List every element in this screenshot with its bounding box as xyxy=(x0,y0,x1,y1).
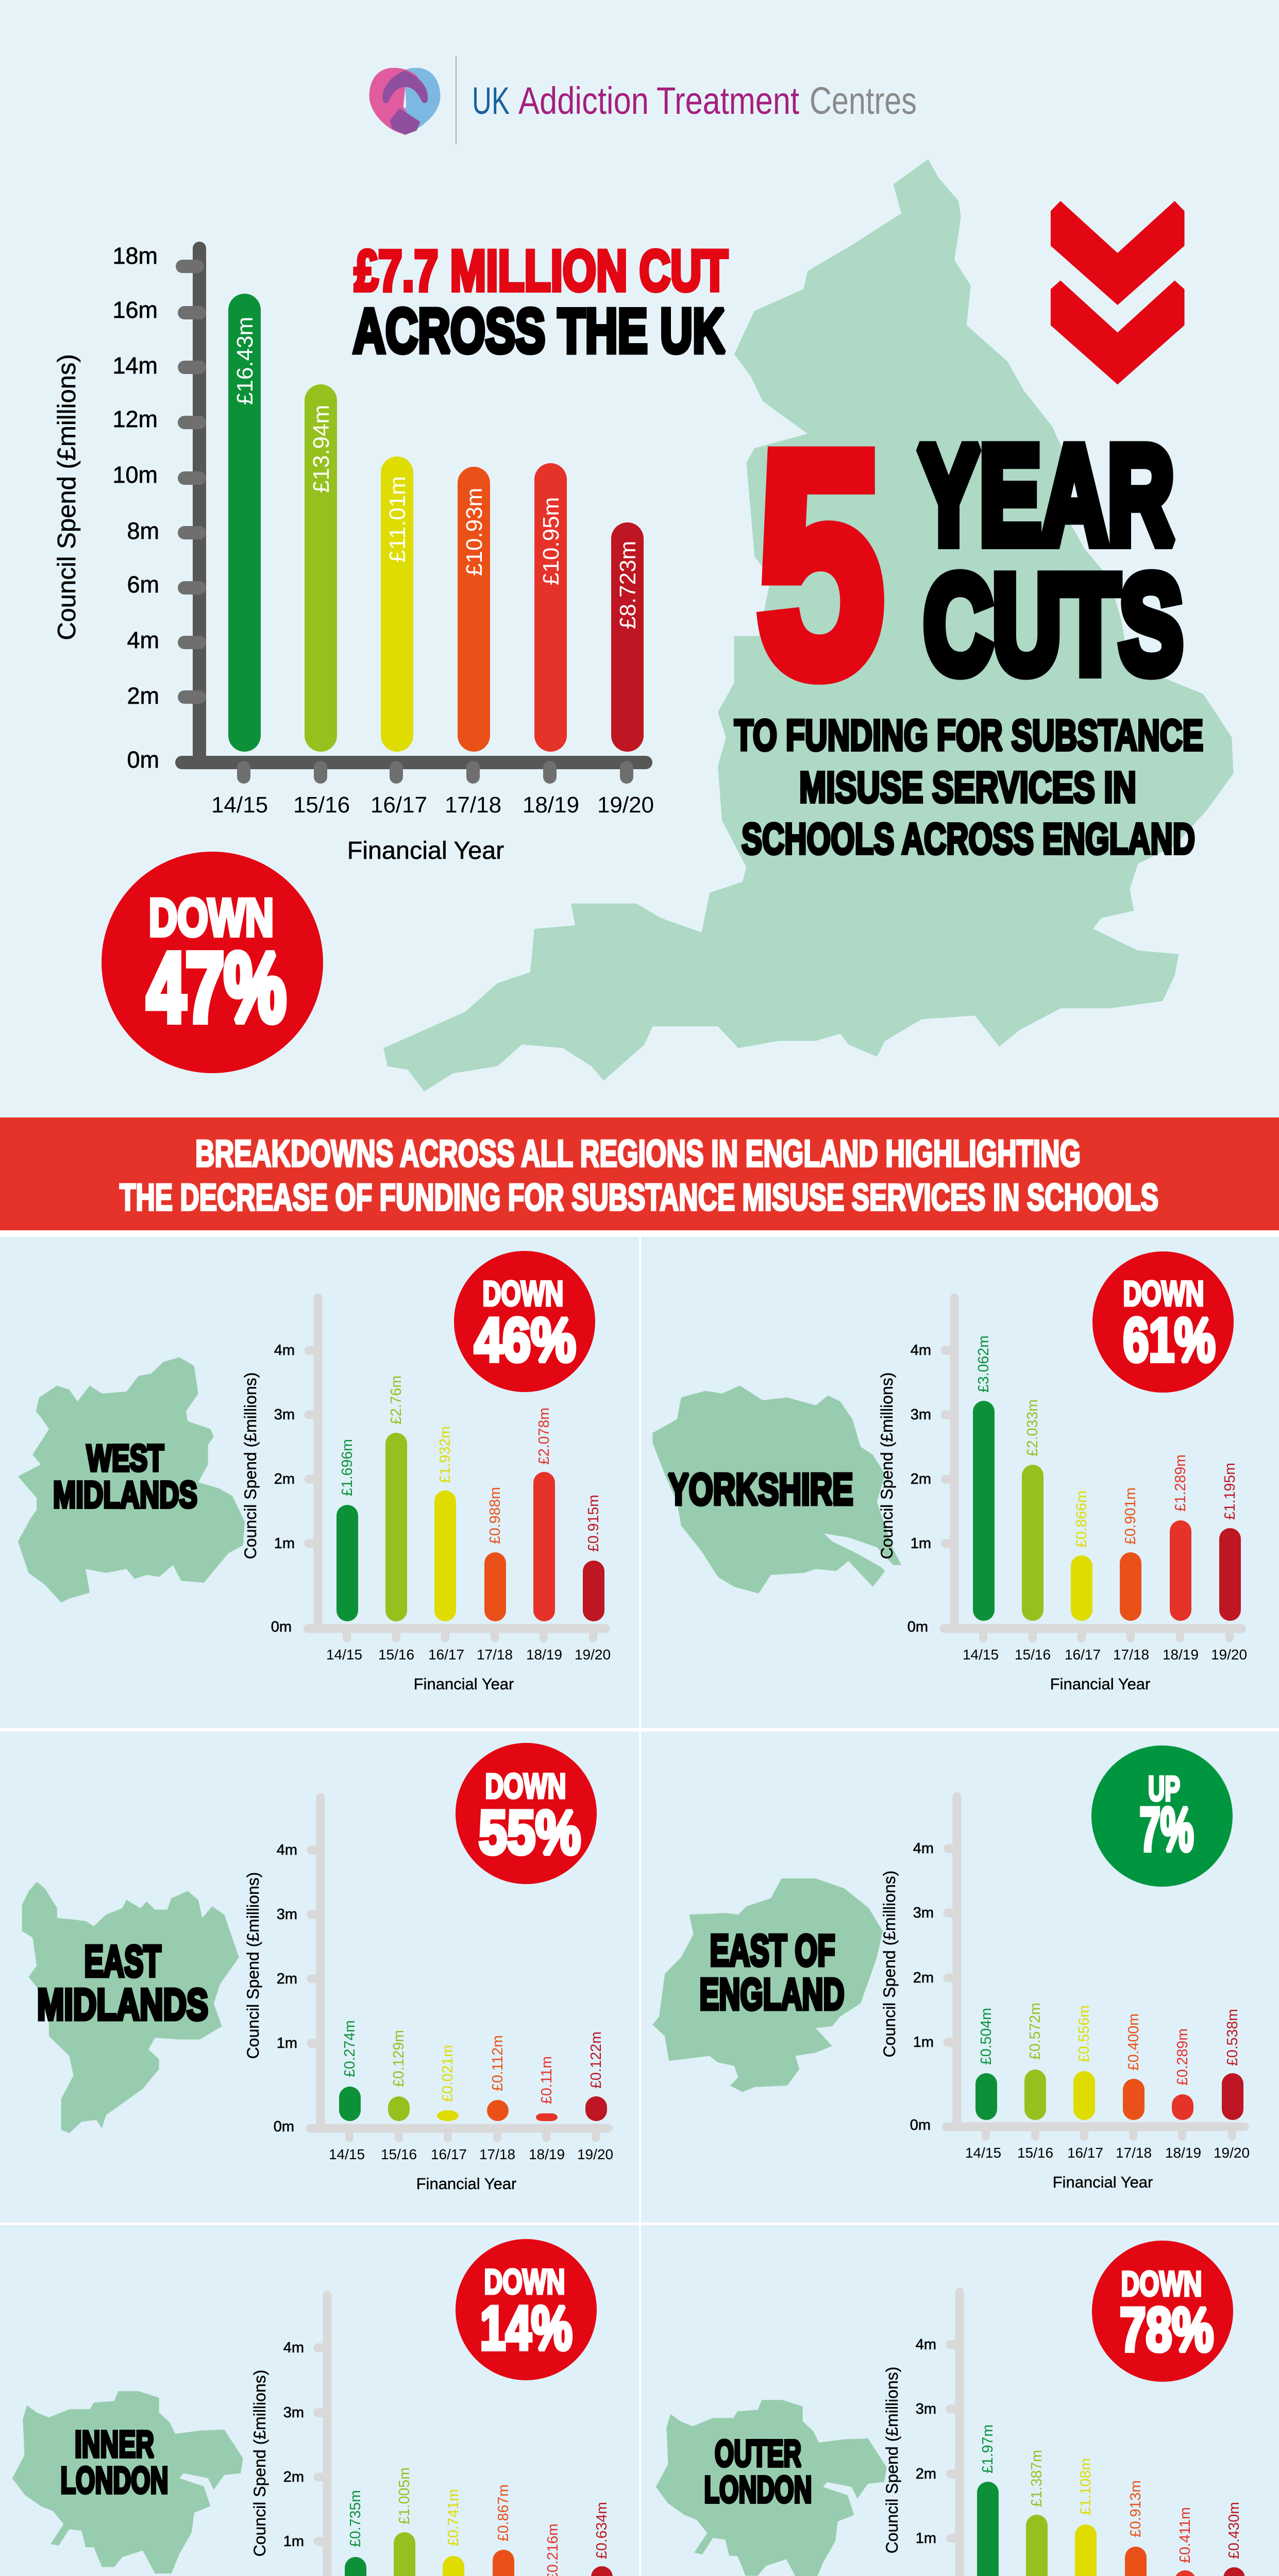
badge: down 14%: DOWN xyxy=(484,2262,565,2301)
logo: UK Addiction Treatment Centres: Addiction xyxy=(518,79,649,122)
bar chart: East of England: Council Spend (£millions) xyxy=(880,1871,899,2057)
bar chart: East Midlands: 0m xyxy=(274,2119,294,2135)
logo: UK Addiction Treatment Centres: UK xyxy=(472,79,510,122)
bar chart: East of England: 15/16 xyxy=(1017,2145,1053,2161)
logo: UK Addiction Treatment Centres: Treatment xyxy=(657,79,799,122)
label: West Midlands: MIDLANDS xyxy=(53,1475,197,1516)
bar chart: West Midlands: Financial Year xyxy=(414,1675,514,1693)
bar chart: Inner London: £0.741m xyxy=(445,2489,462,2546)
bar chart: UK council spend: 18m xyxy=(112,243,158,269)
bar chart: East of England: 1m xyxy=(913,2034,934,2050)
bar chart: West Midlands: £2.078m xyxy=(536,1408,552,1465)
badge: down 46%: 46% xyxy=(474,1306,576,1375)
bar chart: East Midlands: £0.122m xyxy=(588,2031,604,2089)
bar chart: Yorkshire: 3m xyxy=(911,1406,931,1423)
badge: down 47%: 47% xyxy=(147,933,286,1042)
bar chart: Yorkshire: 14/15 xyxy=(963,1647,999,1663)
label: Inner London: INNER xyxy=(75,2424,154,2465)
bar chart: East Midlands: 4m xyxy=(277,1842,297,1858)
bar chart: East of England: 2m xyxy=(913,1970,934,1986)
bar chart: West Midlands: 2m xyxy=(274,1471,295,1487)
bar chart: Yorkshire: 0m xyxy=(907,1619,928,1635)
bar chart: Inner London: 2m xyxy=(283,2469,304,2485)
bar chart: UK council spend: 14/15 xyxy=(211,792,268,818)
bar chart: East of England: 0m xyxy=(910,2117,931,2133)
badge: down 14%: 14% xyxy=(480,2294,572,2363)
bar chart: East of England: £0.572m xyxy=(1027,2003,1044,2060)
bar chart: Yorkshire: 19/20 xyxy=(1211,1647,1247,1663)
bar chart: Yorkshire: 2m xyxy=(911,1471,931,1487)
subheading: funding for substance misuse services xyxy=(734,711,1203,863)
bar chart: Yorkshire: £0.901m xyxy=(1122,1487,1139,1545)
bar chart: East Midlands: 14/15 xyxy=(329,2146,365,2162)
bar chart: West Midlands: £0.915m xyxy=(585,1495,602,1552)
bar chart: UK council spend: Council Spend (£millions) xyxy=(53,354,81,640)
bar chart: Yorkshire: Council Spend (£millions) xyxy=(878,1372,896,1559)
map: Inner London xyxy=(12,2391,243,2573)
badge: up 7%: UP xyxy=(1148,1769,1180,1808)
bar chart: East Midlands: £0.274m xyxy=(342,2020,358,2077)
badge: down 61% xyxy=(1092,1251,1234,1393)
bar chart: Yorkshire: £0.866m xyxy=(1073,1490,1090,1548)
bar chart: West Midlands xyxy=(241,1298,611,1693)
bar chart: Inner London: £0.735m xyxy=(347,2490,364,2547)
bar chart: East Midlands: £0.129m xyxy=(391,2030,407,2087)
bar chart: West Midlands: 14/15 xyxy=(326,1647,362,1663)
panel: Outer London xyxy=(641,2225,1279,2576)
label: East of England: EAST OF xyxy=(710,1926,835,1975)
heading: big 5: 5 xyxy=(755,385,885,742)
bar chart: West Midlands: £0.988m xyxy=(487,1487,503,1544)
bar chart: East of England: 17/18 xyxy=(1116,2145,1152,2161)
badge: down 55% xyxy=(456,1743,597,1884)
bar chart: East of England: 14/15 xyxy=(965,2145,1001,2161)
panel: Yorkshire xyxy=(641,1237,1279,1728)
bar chart: East of England: £0.400m xyxy=(1125,2013,1142,2071)
bar chart: East Midlands: £0.112m xyxy=(490,2035,506,2091)
label: Outer London: OUTER xyxy=(715,2433,801,2475)
badge: down 14% xyxy=(456,2239,597,2380)
bar chart: West Midlands: £1.932m xyxy=(437,1426,453,1483)
label: Outer London xyxy=(704,2433,812,2511)
bar chart: Outer London: £1.108m xyxy=(1078,2458,1094,2515)
label: East Midlands: MIDLANDS xyxy=(37,1980,208,2029)
bar chart: East of England: 18/19 xyxy=(1165,2145,1201,2161)
bar chart: East Midlands: 18/19 xyxy=(529,2146,565,2162)
bar chart: West Midlands: 19/20 xyxy=(575,1647,611,1663)
bar chart: Yorkshire: £3.062m xyxy=(975,1335,992,1393)
bar chart: West Midlands: 3m xyxy=(274,1406,295,1423)
bar chart: Outer London: £0.430m xyxy=(1226,2502,1242,2559)
bar chart: Yorkshire: 18/19 xyxy=(1163,1647,1199,1663)
bar chart: UK council spend: 10m xyxy=(112,462,158,488)
bar chart: East Midlands: £0.11m xyxy=(538,2056,555,2104)
bar chart: UK council spend xyxy=(53,243,654,865)
bar chart: UK council spend: Financial Year xyxy=(347,837,504,865)
panel: East Midlands xyxy=(0,1732,639,2223)
bar chart: UK council spend: 8m xyxy=(127,518,159,544)
bar chart: East Midlands: Council Spend (£millions) xyxy=(244,1872,262,2059)
bar chart: Inner London: 1m xyxy=(283,2533,304,2550)
bar chart: East Midlands: 2m xyxy=(277,1971,297,1987)
bar chart: UK council spend: 2m xyxy=(127,683,159,709)
map: East Midlands xyxy=(22,1882,239,2133)
bar chart: East Midlands: 19/20 xyxy=(577,2146,613,2162)
bar chart: Outer London: £0.913m xyxy=(1127,2480,1144,2537)
badge: down 78%: 78% xyxy=(1120,2295,1214,2364)
subheading: funding for substance misuse services: MISUSE SERVICES IN xyxy=(799,763,1136,811)
badge: down 55%: 55% xyxy=(479,1798,581,1867)
bar chart: Yorkshire: £1.289m xyxy=(1172,1454,1189,1512)
bar chart: Outer London: 3m xyxy=(916,2401,936,2417)
bar chart: West Midlands: Council Spend (£millions) xyxy=(241,1372,260,1559)
bar chart: Outer London: £1.387m xyxy=(1029,2450,1045,2507)
bar chart: Yorkshire: £1.195m xyxy=(1222,1463,1238,1520)
bar chart: East Midlands xyxy=(244,1798,613,2193)
bar chart: Yorkshire xyxy=(878,1298,1247,1693)
bar chart: UK council spend: 6m xyxy=(127,571,159,598)
bar chart: UK council spend: 12m xyxy=(112,406,158,432)
bar chart: UK council spend: 16m xyxy=(112,297,158,323)
bar chart: East Midlands: Financial Year xyxy=(416,2175,516,2193)
bar chart: Inner London: 3m xyxy=(283,2404,304,2421)
map: East of England xyxy=(652,1878,883,2092)
map: England xyxy=(383,159,1233,1092)
logo: UK Addiction Treatment Centres xyxy=(369,56,917,144)
label: East of England xyxy=(700,1926,844,2019)
bar chart: Inner London: 4m xyxy=(283,2340,304,2356)
bar chart: Outer London: 2m xyxy=(916,2466,936,2482)
bar chart: UK council spend: £8.723m xyxy=(615,541,641,629)
bar chart: Outer London: £1.97m xyxy=(980,2425,996,2473)
bar chart: UK council spend: 16/17 xyxy=(371,792,427,818)
badge: down 46%: DOWN xyxy=(482,1274,564,1313)
bar chart: UK council spend: 14m xyxy=(112,352,158,379)
bar chart: UK council spend: £13.94m xyxy=(309,405,334,493)
bar chart: East of England: Financial Year xyxy=(1053,2173,1153,2191)
bar chart: Inner London: £0.867m xyxy=(495,2484,512,2541)
bar chart: Yorkshire: 16/17 xyxy=(1065,1647,1101,1663)
panel: Inner London xyxy=(0,2225,639,2576)
bar chart: West Midlands: 15/16 xyxy=(378,1647,414,1663)
label: East of England: ENGLAND xyxy=(700,1970,844,2019)
bar chart: West Midlands: £2.76m xyxy=(388,1376,405,1425)
bar chart: Outer London: Council Spend (£millions) xyxy=(883,2367,901,2553)
bar chart: East of England: 3m xyxy=(913,1905,934,1921)
bar chart: Outer London: 1m xyxy=(916,2530,936,2547)
bar chart: UK council spend: 15/16 xyxy=(293,792,350,818)
heading: 7.7 million cut: £7.7 MILLION CUT xyxy=(355,239,728,303)
bar chart: West Midlands: £1.696m xyxy=(339,1439,356,1496)
bar chart: Inner London: £1.005m xyxy=(396,2467,413,2524)
bar chart: East Midlands: £0.021m xyxy=(440,2045,456,2102)
panel: West Midlands xyxy=(0,1237,639,1728)
badge: down 55%: DOWN xyxy=(485,1767,566,1806)
bar chart: UK council spend: 0m xyxy=(127,747,159,773)
bar chart: East of England: 16/17 xyxy=(1067,2145,1103,2161)
bar chart: West Midlands: 1m xyxy=(274,1535,295,1552)
label: West Midlands: WEST xyxy=(87,1438,164,1479)
bar chart: Yorkshire: Financial Year xyxy=(1050,1675,1150,1693)
bar chart: East Midlands: 15/16 xyxy=(381,2146,417,2162)
bar chart: UK council spend: £16.43m xyxy=(232,317,258,405)
map: Outer London xyxy=(656,2400,887,2576)
bar chart: Yorkshire: 17/18 xyxy=(1113,1647,1149,1663)
badge: down 46% xyxy=(454,1251,595,1392)
bar chart: Yorkshire: 4m xyxy=(911,1342,931,1359)
bar chart: UK council spend: 19/20 xyxy=(597,792,654,818)
bar chart: East of England xyxy=(880,1797,1250,2191)
bar chart: UK council spend: 17/18 xyxy=(445,792,501,818)
bar chart: Outer London: 4m xyxy=(916,2336,936,2353)
icon: double down chevron xyxy=(1051,201,1185,384)
label: Inner London xyxy=(61,2424,168,2501)
bar chart: East of England: £0.289m xyxy=(1174,2028,1191,2086)
badge: up 7% xyxy=(1091,1745,1233,1887)
badge: down 47%: DOWN xyxy=(149,888,274,947)
map: West Midlands xyxy=(18,1357,245,1602)
label: Inner London: LONDON xyxy=(61,2460,168,2501)
bar chart: West Midlands: 0m xyxy=(271,1619,292,1635)
badge: down 78%: DOWN xyxy=(1121,2264,1202,2303)
badge: down 78% xyxy=(1092,2241,1233,2382)
map: Yorkshire xyxy=(652,1386,901,1594)
bar chart: UK council spend: £10.93m xyxy=(462,488,487,576)
bar chart: East Midlands: 1m xyxy=(277,2035,297,2052)
label: East Midlands: EAST xyxy=(85,1937,161,1986)
bar chart: UK council spend: 4m xyxy=(127,627,159,653)
label: East Midlands xyxy=(37,1937,208,2029)
label: Yorkshire: YORKSHIRE xyxy=(668,1465,853,1514)
logo: UK Addiction Treatment Centres: Centres xyxy=(810,79,917,122)
bar chart: UK council spend: £11.01m xyxy=(385,476,410,563)
label: West Midlands xyxy=(53,1438,197,1516)
badge: up 7%: 7% xyxy=(1140,1795,1193,1864)
bar chart: Inner London: Council Spend (£millions) xyxy=(250,2370,269,2556)
bar chart: Yorkshire: 1m xyxy=(911,1535,931,1552)
bar chart: Outer London xyxy=(883,2292,1251,2576)
bar chart: Outer London: £0.411m xyxy=(1177,2507,1193,2563)
bar chart: East Midlands: 16/17 xyxy=(431,2146,467,2162)
panel: East of England xyxy=(641,1732,1279,2223)
heading: across the UK: ACROSS THE UK xyxy=(353,296,725,366)
bar chart: Inner London: £0.634m xyxy=(594,2502,610,2559)
bar chart: East Midlands: 17/18 xyxy=(479,2146,515,2162)
bar chart: East of England: £0.538m xyxy=(1224,2009,1241,2066)
bar chart: Yorkshire: 15/16 xyxy=(1015,1647,1051,1663)
badge: down 61%: 61% xyxy=(1123,1306,1215,1375)
bar chart: UK council spend: £10.95m xyxy=(538,497,564,585)
label: Outer London: LONDON xyxy=(704,2469,812,2511)
bar chart: East of England: £0.556m xyxy=(1076,2005,1092,2062)
bar chart: West Midlands: 18/19 xyxy=(526,1647,562,1663)
badge: down 61%: DOWN xyxy=(1123,1274,1204,1313)
bar chart: West Midlands: 16/17 xyxy=(428,1647,464,1663)
bar chart: East of England: 4m xyxy=(913,1840,934,1857)
bar chart: East Midlands: 3m xyxy=(277,1906,297,1923)
bar chart: Inner London xyxy=(250,2295,619,2576)
bar chart: UK council spend: 18/19 xyxy=(523,792,579,818)
bar chart: East of England: 19/20 xyxy=(1214,2145,1250,2161)
bar chart: East of England: £0.504m xyxy=(978,2008,995,2065)
banner: breakdowns across all regions xyxy=(0,1117,1279,1230)
badge: down 47% xyxy=(102,852,323,1073)
bar chart: Yorkshire: £2.033m xyxy=(1024,1399,1041,1456)
bar chart: West Midlands: 17/18 xyxy=(477,1647,513,1663)
bar chart: West Midlands: 4m xyxy=(274,1342,295,1359)
